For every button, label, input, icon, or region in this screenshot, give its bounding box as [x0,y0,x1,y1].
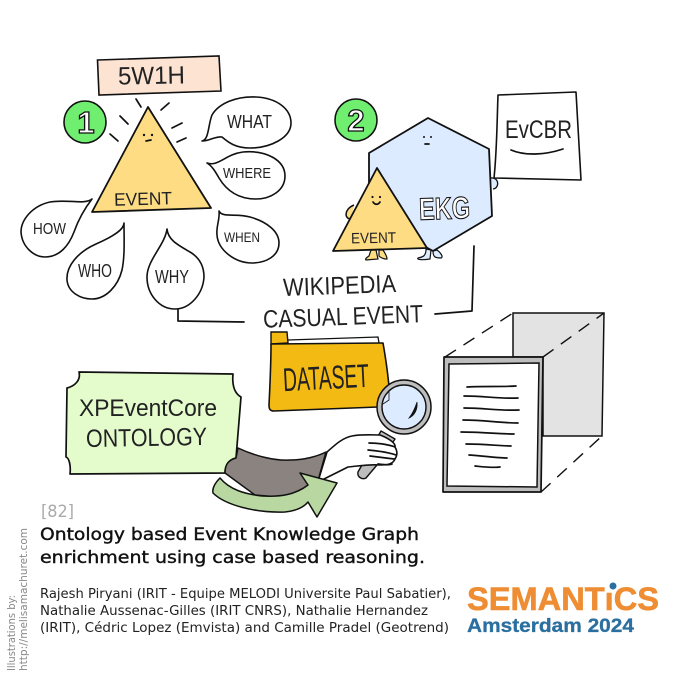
authors: (IRIT), Cédric Lopez (Emvista) and Camille Pradel (Geotrend) [40,621,449,636]
illustration credit [6,528,30,671]
illustration credit: http://melisamachuret.com [18,528,30,671]
badge: number 1: 1 [77,105,95,140]
character: EKG hexagon: EKG [418,190,471,227]
ticket: XPEventCore ontology: ONTOLOGY [86,423,208,453]
authors: Nathalie Aussenac-Gilles (IRIT CNRS), Nathalie Hernandez [40,604,428,619]
hand holding the magnifying glass [316,435,397,488]
character: EKG hexagon [369,118,498,260]
ticket: XPEventCore ontology: XPEventCore [79,395,217,422]
connector: EKG to Wikipedia dataset [435,246,474,314]
speech bubble: WHAT: WHAT [227,112,272,132]
note: EvCBR [494,92,581,180]
speech bubble: WHAT [202,97,291,148]
heading: Wikipedia casual event: WIKIPEDIA [283,270,397,302]
character: small event triangle [333,168,427,260]
logo: SEMANTiCS Amsterdam 2024: SEMANTıCS [467,581,659,617]
speech bubble: WHY [147,229,204,309]
magnifying glass [358,380,431,479]
paper title: Ontology based Event Knowledge Graph [40,525,419,545]
authors [40,587,451,636]
logo: SEMANTiCS Amsterdam 2024: Amsterdam 2024 [467,616,634,637]
ticket: XPEventCore ontology [66,372,241,474]
speech bubble: HOW [21,199,92,257]
curved arrow [213,473,337,517]
speech bubble: WHEN [217,211,279,263]
character: small event triangle: EVENT [351,230,396,247]
emphasis rays around event triangle [110,99,186,142]
speech bubble: WHY: WHY [155,267,189,287]
label box: 5W1H: 5W1H [118,61,185,91]
speech bubble: HOW: HOW [33,221,67,238]
heading: Wikipedia casual event [263,270,423,334]
character: event triangle: EVENT [114,188,172,210]
heading: Wikipedia casual event: CASUAL EVENT [263,300,423,334]
document box: front paper page [443,357,543,492]
illustration credit: Illustrations by: [6,595,18,671]
folder: dataset [269,332,389,411]
paper title: enrichment using case based reasoning. [40,548,425,568]
badge: number 2 [335,99,377,141]
connector: WHY to Wikipedia dataset [178,309,244,322]
paper title [40,525,425,568]
authors: Rajesh Piryani (IRIT - Equipe MELODI Universite Paul Sabatier), [40,587,451,602]
speech bubble: WHERE: WHERE [223,166,271,182]
note: EvCBR: EvCBR [505,116,572,144]
paper number: [82] [41,502,74,522]
speech bubble: WHEN: WHEN [224,229,260,245]
folder: dataset: DATASET [282,357,370,398]
label box: 5W1H [98,56,221,95]
badge: number 2: 2 [347,103,365,138]
speech bubble: WHERE [207,152,285,199]
character: event triangle [92,107,211,212]
speech bubble: WHO: WHO [78,261,112,281]
speech bubble: WHO [67,223,124,299]
badge: number 1 [64,101,106,143]
document box: back panel and dashed edges [445,313,604,492]
logo: SEMANTiCS Amsterdam 2024 [467,581,659,637]
sleeve [225,448,326,498]
